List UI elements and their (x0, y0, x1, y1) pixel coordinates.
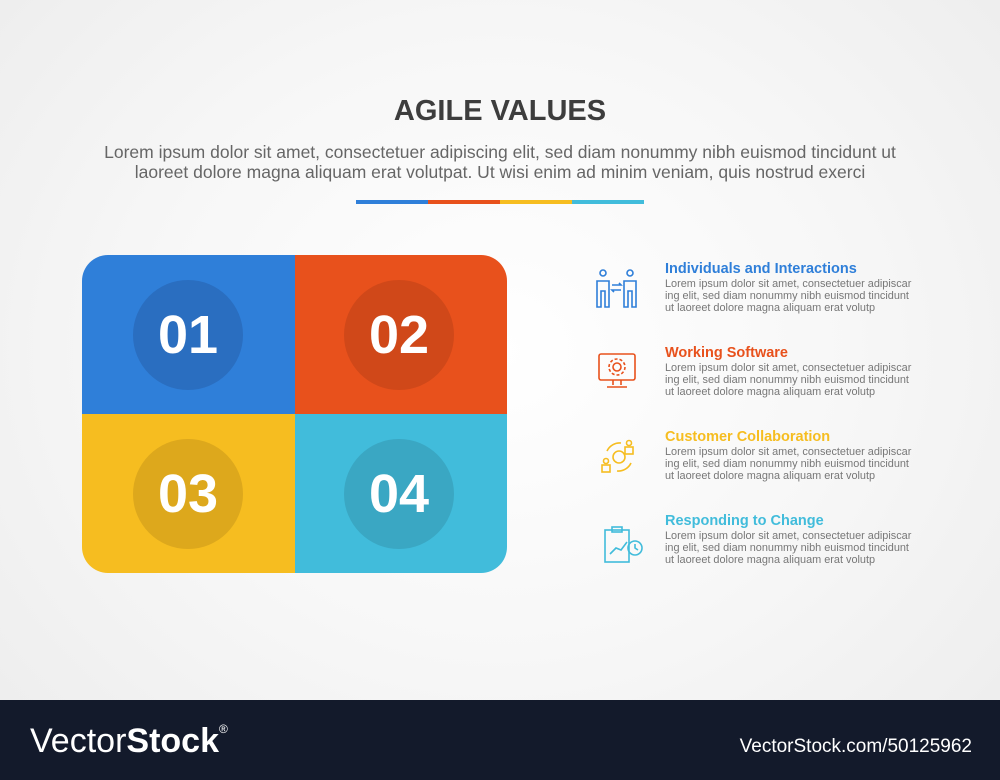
title: AGILE VALUES (394, 95, 606, 127)
icon: collaboration (601, 440, 634, 473)
quadrant 02: 02 (369, 305, 429, 365)
color divider (356, 200, 644, 204)
item 2: Lorem ipsum dolor sit amet, consectetuer adipiscar (665, 362, 911, 374)
icon: monitor gear (598, 353, 636, 388)
item 2: ut laoreet dolore magna aliquam erat volutp (665, 386, 875, 398)
quadrant 04: 04 (369, 464, 429, 524)
item 4: ut laoreet dolore magna aliquam erat volutp (665, 554, 875, 566)
item 4: Lorem ipsum dolor sit amet, consectetuer adipiscar (665, 530, 911, 542)
subtitle text: Lorem ipsum dolor sit amet, consectetuer adipiscing elit, sed diam nonummy nibh euismod tincidunt ut (104, 142, 896, 162)
item 1 (596, 261, 912, 314)
footer id: VectorStock.com/50125962 (740, 736, 972, 757)
quadrant 01 (82, 255, 295, 414)
item 2: ing elit, sed diam nonummy nibh euismod tincidunt (665, 374, 909, 386)
item 4: ing elit, sed diam nonummy nibh euismod tincidunt (665, 542, 909, 554)
item 3: Lorem ipsum dolor sit amet, consectetuer adipiscar (665, 446, 911, 458)
quadrant 02 (295, 255, 507, 414)
item 3: Customer Collaboration (665, 429, 830, 445)
item 2 (598, 345, 912, 398)
icon: clipboard clock (604, 526, 643, 563)
quadrant 03 (82, 414, 295, 573)
item 4 (604, 513, 912, 566)
quadrant grid (82, 255, 507, 573)
item 3: ing elit, sed diam nonummy nibh euismod tincidunt (665, 458, 909, 470)
item 3 (601, 429, 912, 482)
item 2: Working Software (665, 345, 788, 361)
footer logo: VectorStock® (30, 722, 228, 760)
icon: people (596, 269, 637, 308)
item 4: Responding to Change (665, 513, 824, 529)
quadrant 04 (295, 414, 507, 573)
item 1: Lorem ipsum dolor sit amet, consectetuer adipiscar (665, 278, 911, 290)
quadrant 01: 01 (158, 305, 218, 365)
subtitle text: laoreet dolore magna aliquam erat volutpat. Ut wisi enim ad minim veniam, quis nostrud exerci (135, 162, 865, 182)
item 3: ut laoreet dolore magna aliquam erat volutp (665, 470, 875, 482)
item 1: Individuals and Interactions (665, 261, 857, 277)
item 1: ut laoreet dolore magna aliquam erat volutp (665, 302, 875, 314)
quadrant 03: 03 (158, 464, 218, 524)
subtitle text (104, 142, 896, 182)
footer bar (0, 700, 1000, 780)
item 1: ing elit, sed diam nonummy nibh euismod tincidunt (665, 290, 909, 302)
